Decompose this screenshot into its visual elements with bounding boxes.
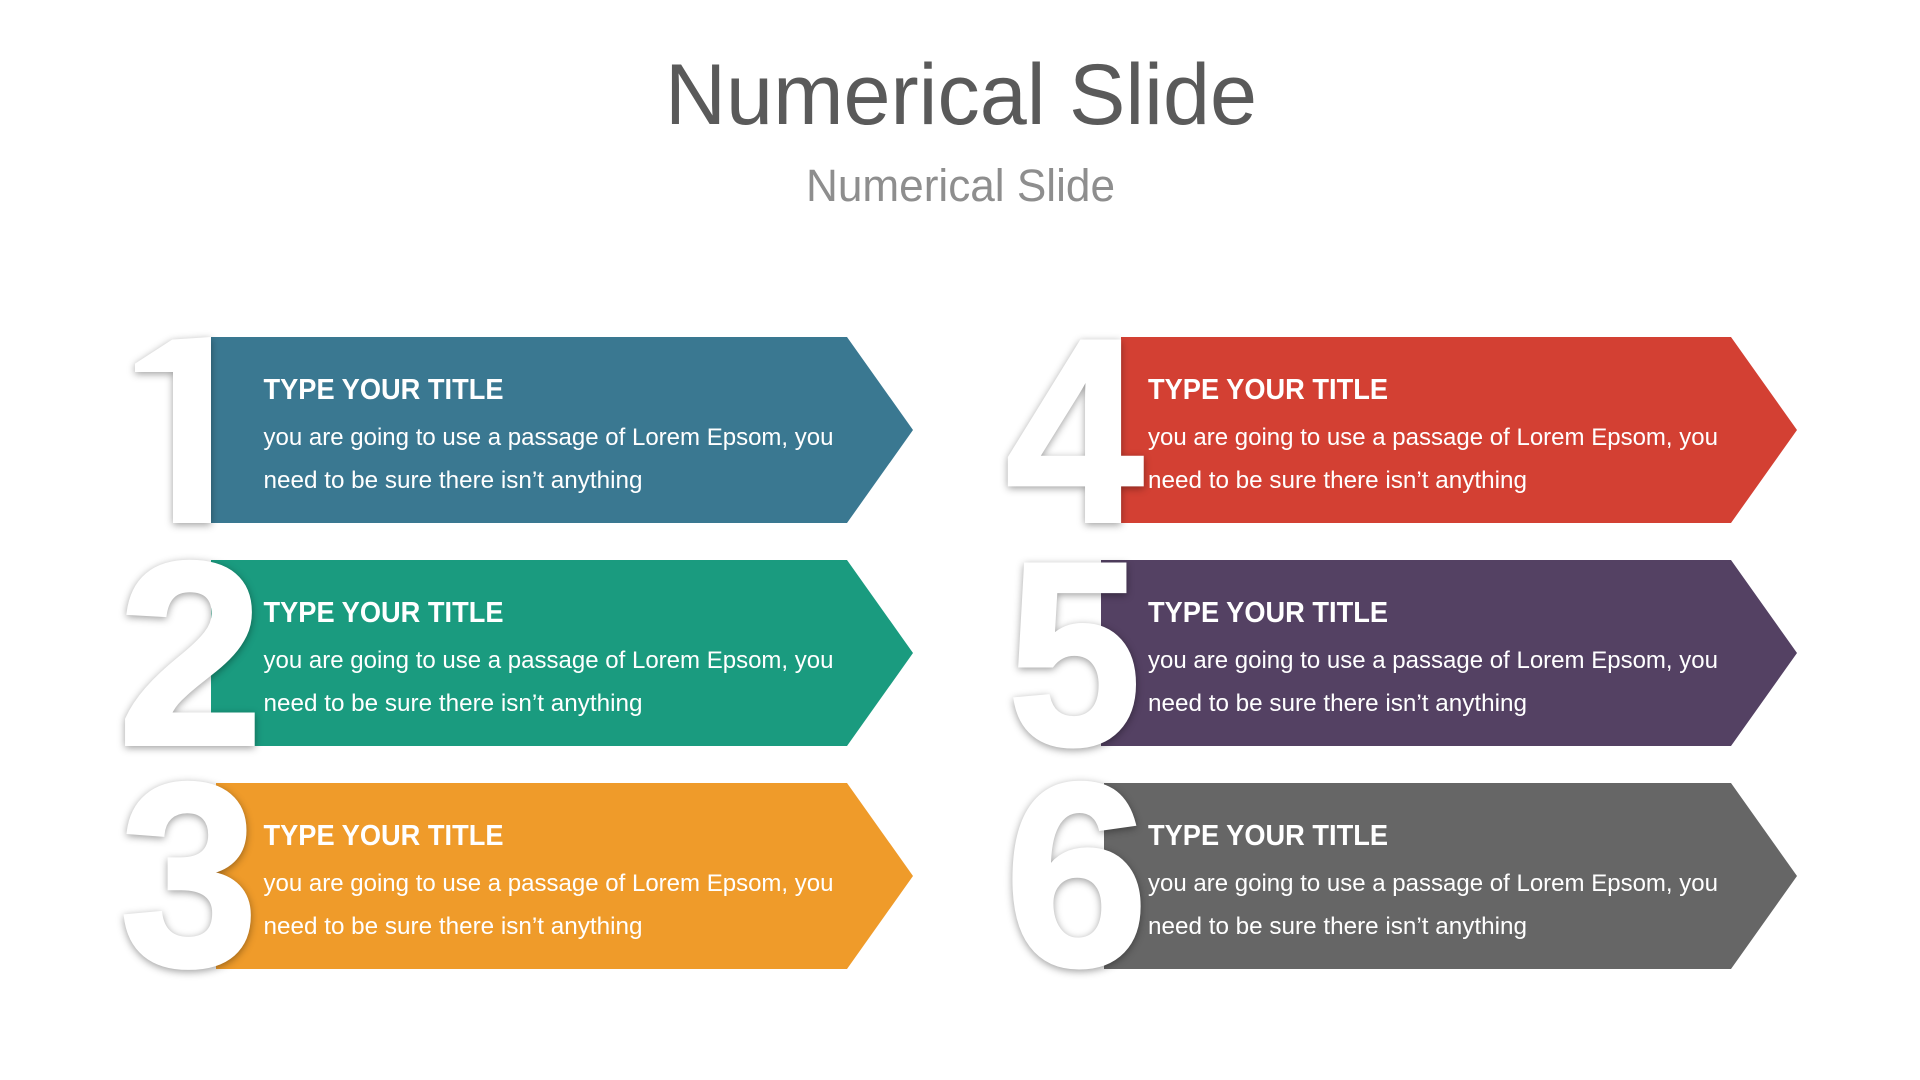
item 5 text [1148, 647, 1718, 717]
panel: item 5 [1008, 509, 1797, 800]
panel: item 1 [113, 283, 913, 580]
subtitle: Numerical Slide [806, 160, 1115, 211]
item 1 text: you are going to use a passage of Lorem Epsom, you [264, 424, 834, 451]
item 3 text: you are going to use a passage of Lorem Epsom, you [264, 870, 834, 897]
panel: item 6 [1005, 728, 1797, 1020]
arrow banner 3 [216, 783, 913, 969]
panel: item 4 [1006, 285, 1797, 577]
item 1 text [264, 424, 834, 494]
item 6 text: you are going to use a passage of Lorem Epsom, you [1148, 870, 1718, 897]
number 6: 6 [1005, 728, 1148, 1020]
item 2 text: need to be sure there isn’t anything [264, 690, 642, 717]
arrow banner 6 [1104, 783, 1797, 969]
item 5 text: need to be sure there isn’t anything [1148, 690, 1527, 717]
item 1 text: need to be sure there isn’t anything [264, 467, 642, 494]
item 1 title: TYPE YOUR TITLE [264, 374, 504, 406]
item 2 text [264, 647, 834, 717]
item 6 text: need to be sure there isn’t anything [1148, 913, 1527, 940]
item 3 title: TYPE YOUR TITLE [264, 820, 504, 852]
item 4 title: TYPE YOUR TITLE [1148, 374, 1388, 406]
panel: item 2 [118, 509, 913, 800]
panel: item 3 [120, 729, 913, 1020]
item 2 title: TYPE YOUR TITLE [264, 597, 504, 629]
arrow banner 2 [211, 560, 913, 746]
item 2 text: you are going to use a passage of Lorem Epsom, you [264, 647, 834, 674]
item 3 text [264, 870, 834, 940]
number 4: 4 [1006, 285, 1143, 577]
item 4 text: need to be sure there isn’t anything [1148, 467, 1527, 494]
item 6 title: TYPE YOUR TITLE [1148, 820, 1388, 852]
title: Numerical Slide [665, 47, 1257, 143]
arrow banner 4 [1121, 337, 1797, 523]
arrow banner 1 [211, 337, 913, 523]
item 4 text [1148, 424, 1718, 494]
number 1: 1 [113, 283, 261, 580]
item 3 text: need to be sure there isn’t anything [264, 913, 642, 940]
number 3: 3 [120, 729, 258, 1020]
item 5 title: TYPE YOUR TITLE [1148, 597, 1388, 629]
number 5: 5 [1008, 509, 1141, 800]
number 2: 2 [118, 509, 263, 800]
arrow banner 5 [1101, 560, 1797, 746]
item 5 text: you are going to use a passage of Lorem Epsom, you [1148, 647, 1718, 674]
item 4 text: you are going to use a passage of Lorem Epsom, you [1148, 424, 1718, 451]
item 6 text [1148, 870, 1718, 940]
